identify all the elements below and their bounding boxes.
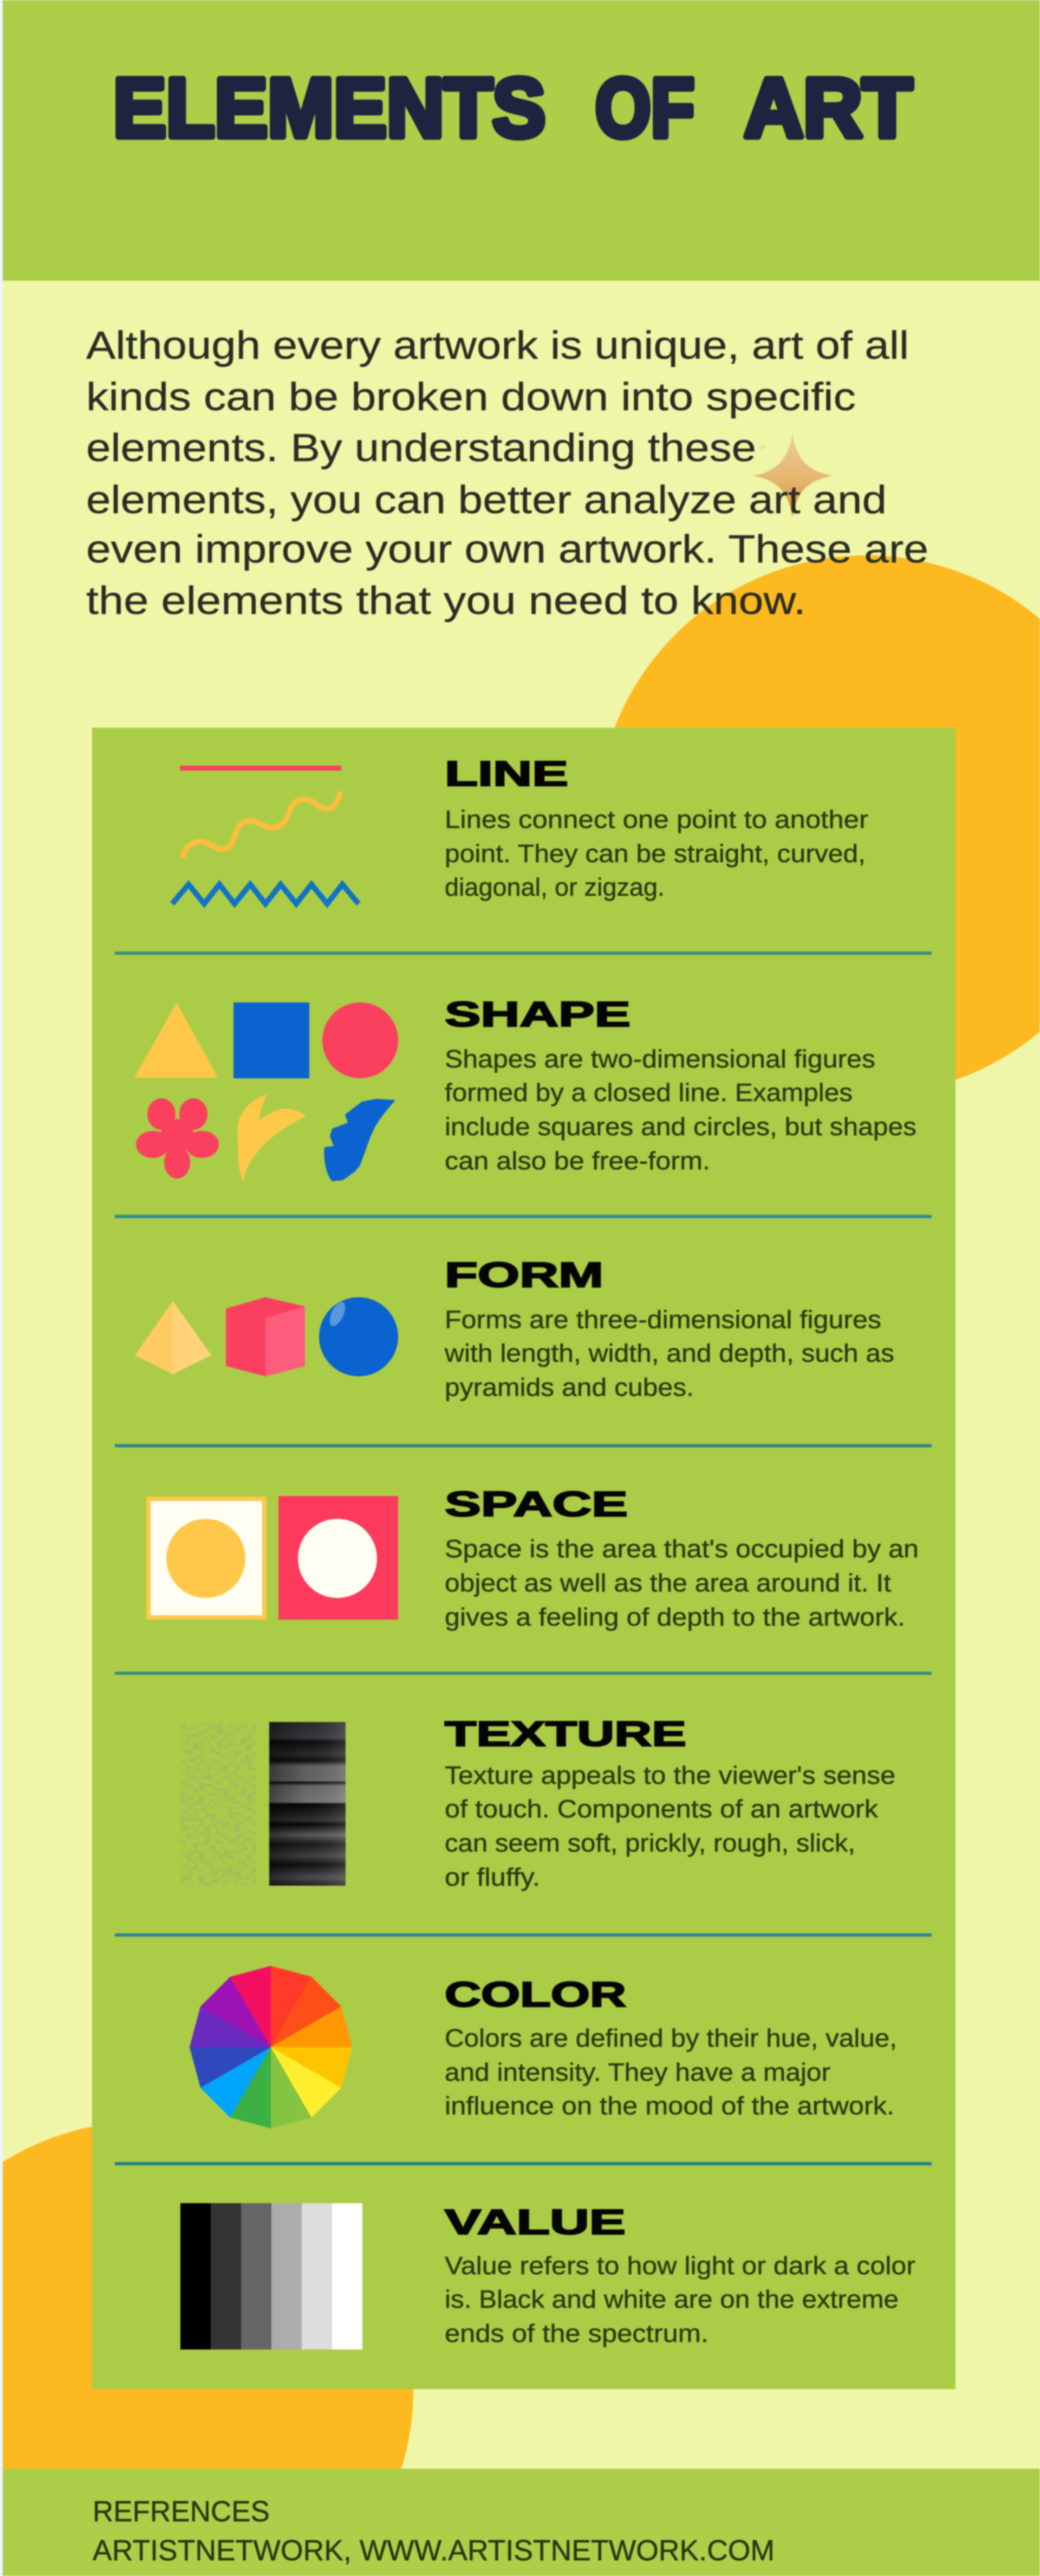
description: shape: Shapes are two-dimensional figures <box>445 1045 875 1073</box>
title: ELEMENTS <box>113 61 545 154</box>
section: value <box>180 2202 915 2350</box>
description: color <box>445 2024 897 2120</box>
description: space: Space is the area that's occupied by an <box>445 1535 919 1563</box>
panel background <box>92 728 955 2389</box>
description: texture <box>445 1761 895 1891</box>
heading: texture: TEXTURE <box>445 1714 686 1753</box>
title: ART <box>744 61 912 154</box>
description: form: pyramids and cubes. <box>445 1373 694 1401</box>
references text: ARTISTNETWORK, WWW.ARTISTNETWORK.COM <box>93 2534 775 2567</box>
section: form <box>135 1255 894 1401</box>
description: space <box>445 1535 919 1631</box>
header band <box>3 0 1040 281</box>
description: shape: formed by a closed line. Examples <box>445 1078 853 1106</box>
panel: elements list <box>92 728 955 2389</box>
description: line <box>445 805 868 901</box>
description: texture: can seem soft, prickly, rough, slick, <box>445 1829 855 1857</box>
description: line: diagonal, or zigzag. <box>445 873 665 901</box>
heading: color: COLOR <box>445 1975 626 2014</box>
references text <box>93 2495 775 2567</box>
intro paragraph: kinds can be broken down into specific <box>86 376 856 419</box>
intro paragraph: even improve your own artwork. These are <box>86 528 928 571</box>
section: color <box>190 1966 897 2128</box>
intro paragraph: elements. By understanding these <box>86 426 756 470</box>
intro paragraph: elements, you can better analyze art and <box>86 478 887 522</box>
heading: form: FORM <box>445 1255 603 1295</box>
icon: six flat shapes <box>134 1002 398 1182</box>
heading: value: VALUE <box>445 2202 626 2242</box>
description: space: gives a feeling of depth to the artwork. <box>445 1603 905 1631</box>
icon: value scale <box>180 2203 362 2350</box>
icon: texture swatches <box>180 1722 346 1886</box>
footer band <box>3 2469 1040 2576</box>
title: OF <box>595 61 694 154</box>
description: value: Value refers to how light or dark a color <box>445 2251 915 2280</box>
decorative orange circle, bottom left <box>3 2121 413 2469</box>
description: texture: of touch. Components of an artwork <box>445 1795 879 1823</box>
title <box>113 61 912 154</box>
description: line: point. They can be straight, curved, <box>445 839 866 868</box>
icon: three solid forms <box>135 1297 398 1376</box>
description: shape <box>445 1045 916 1175</box>
section: shape <box>134 994 916 1182</box>
description: texture: Texture appeals to the viewer's sense <box>445 1761 895 1789</box>
icon: sparkle star <box>753 433 833 517</box>
heading: line: LINE <box>445 754 568 793</box>
description: space: object as well as the area around it. It <box>445 1569 891 1597</box>
intro paragraph <box>86 324 928 623</box>
heading: space: SPACE <box>445 1484 628 1524</box>
description: line: Lines connect one point to another <box>445 805 868 833</box>
description: shape: can also be free-form. <box>445 1147 710 1175</box>
icon: positive and negative space <box>148 1496 398 1620</box>
section: line <box>172 754 868 904</box>
description: form <box>444 1305 894 1401</box>
description: color: and intensity. They have a major <box>445 2058 830 2086</box>
icon: color wheel <box>190 1966 352 2128</box>
description: value: is. Black and white are on the extreme <box>445 2285 899 2313</box>
description: value: ends of the spectrum. <box>445 2319 708 2347</box>
icon: three line types <box>172 766 359 904</box>
description: color: Colors are defined by their hue, value, <box>445 2024 897 2052</box>
decorative orange circle, top right <box>596 555 1040 1095</box>
description: form: Forms are three-dimensional figures <box>445 1305 881 1334</box>
references text: REFRENCES <box>93 2495 270 2528</box>
section: space <box>148 1484 919 1631</box>
description: texture: or fluffy. <box>445 1863 540 1891</box>
description: color: influence on the mood of the artwork. <box>445 2092 894 2120</box>
section: texture <box>180 1714 895 1891</box>
description: shape: include squares and circles, but shapes <box>445 1112 916 1141</box>
description: form: with length, width, and depth, such as <box>444 1339 894 1367</box>
heading: shape: SHAPE <box>445 994 630 1034</box>
intro paragraph: Although every artwork is unique, art of all <box>86 324 909 367</box>
description: value <box>445 2251 915 2347</box>
intro paragraph: the elements that you need to know. <box>86 579 806 623</box>
